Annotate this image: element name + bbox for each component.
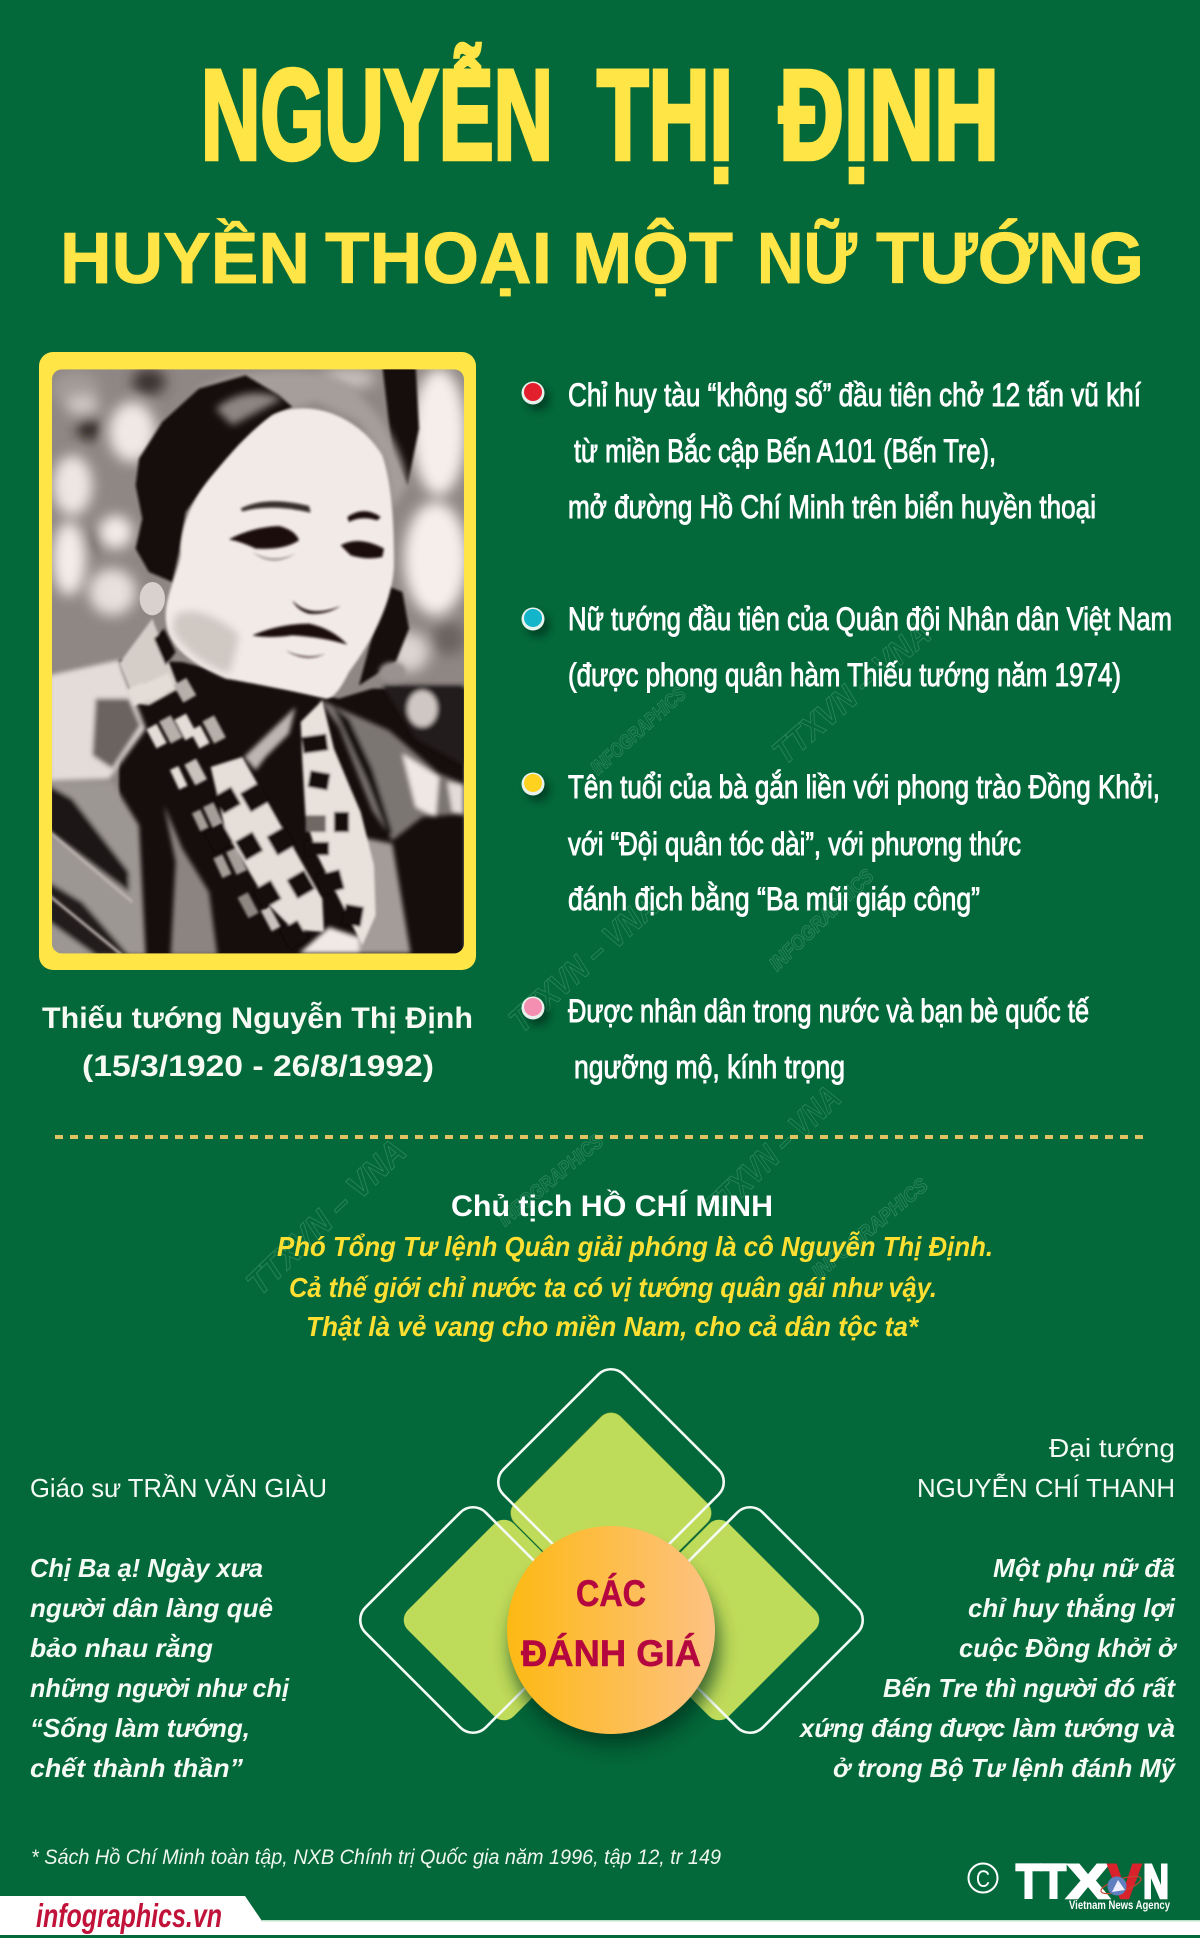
watermarks: TTXVN – VNA	[502, 887, 666, 1040]
quote text: Thật là vẻ vang cho miền Nam, cho cả dân tộc ta*	[306, 1311, 919, 1342]
quote: Ho Chi Minh	[277, 1189, 993, 1342]
fact 3 text	[568, 769, 1160, 917]
quote text	[30, 1553, 290, 1783]
title: main name: NGUYỄN	[201, 44, 553, 187]
wordmark: V	[1108, 1856, 1141, 1909]
neck light	[244, 707, 296, 770]
lower chest light	[359, 837, 411, 953]
watermarks: TTXVN – VNA	[239, 1132, 414, 1303]
quote text	[277, 1231, 993, 1342]
watermarks: TTXVN – VNA	[765, 615, 938, 772]
centre label: CÁC	[576, 1573, 646, 1614]
author: Đại tướng	[1049, 1433, 1175, 1463]
copyright mark: C	[976, 1866, 990, 1893]
copyright mark	[968, 1864, 998, 1893]
quote author: Chủ tịch HỒ CHÍ MINH	[451, 1189, 773, 1223]
centre circle shadow	[511, 1546, 719, 1746]
bullet: cyan	[522, 608, 550, 637]
green diamonds	[398, 1407, 825, 1726]
face	[166, 408, 394, 699]
fact 3 text: đánh địch bằng “Ba mũi giáp công”	[568, 881, 980, 917]
wordmark: TT	[1016, 1856, 1066, 1909]
quote text: Cả thế giới chỉ nước ta có vị tướng quân gái như vậy.	[289, 1272, 937, 1303]
fact 4	[522, 993, 1089, 1085]
scarf: main diagonal band	[205, 757, 324, 949]
watermarks: INFOGRAPHICS	[765, 865, 879, 976]
lower body base	[119, 660, 464, 955]
facial features	[229, 501, 384, 658]
scarf: right band	[301, 700, 376, 945]
portrait caption: Thiếu tướng Nguyễn Thị Định	[42, 1001, 473, 1035]
centre label: ĐÁNH GIÁ	[521, 1633, 701, 1674]
dark hair	[136, 375, 292, 582]
site name: infographics.vn	[36, 1897, 222, 1934]
author: NGUYỄN CHÍ THANH	[917, 1473, 1175, 1503]
fact 3	[522, 769, 1160, 917]
bullet: red	[522, 382, 550, 411]
chest light panel	[164, 805, 217, 955]
watermarks: INFOGRAPHICS	[494, 1130, 608, 1231]
left shoulder light	[49, 660, 146, 780]
title: subtitle: MỘT	[572, 218, 733, 299]
fact 4 text	[568, 993, 1089, 1085]
footnote: * Sách Hồ Chí Minh toàn tập, NXB Chính trị Quốc gia năm 1996, tập 12, tr 149	[31, 1846, 721, 1869]
right shoulder	[319, 699, 464, 840]
quote: Tran Van Giau	[30, 1473, 327, 1783]
portrait caption	[42, 1001, 473, 1083]
title: subtitle: TƯỚNG	[876, 218, 1144, 299]
dark vertical behind head	[382, 365, 419, 485]
wordmark	[1016, 1856, 1169, 1909]
left sleeve	[49, 782, 146, 955]
title: main name	[201, 44, 999, 187]
logo: TTXVN	[968, 1856, 1170, 1912]
quote: Nguyen Chi Thanh	[798, 1433, 1177, 1783]
quote text: Phó Tổng Tư lệnh Quân giải phóng là cô Nguyễn Thị Định.	[277, 1231, 993, 1262]
quote text: Chị Ba ạ! Ngày xưa	[30, 1553, 263, 1583]
fact 4 text: ngưỡng mộ, kính trọng	[574, 1049, 845, 1085]
gray hair top	[196, 371, 407, 509]
wordmark: X	[1067, 1856, 1109, 1909]
quote text: chết thành thần”	[30, 1753, 243, 1783]
fact 1	[522, 377, 1141, 525]
quote text: chỉ huy thắng lợi	[968, 1593, 1176, 1623]
portrait frame	[39, 352, 476, 970]
fact 1 text: từ miền Bắc cập Bến A101 (Bến Tre),	[574, 433, 996, 469]
quote text: “Sống làm tướng,	[30, 1713, 250, 1743]
agency name: Vietnam News Agency	[1069, 1898, 1170, 1912]
globe	[1099, 1873, 1143, 1897]
quote text: xứng đáng được làm tướng và	[798, 1713, 1175, 1743]
author	[917, 1433, 1175, 1503]
watermarks: TTXVN – VNA	[698, 1079, 848, 1226]
portrait caption: (15/3/1920 - 26/8/1992)	[82, 1050, 434, 1083]
fact 1 text	[568, 377, 1141, 525]
quote text: người dân làng quê	[30, 1593, 273, 1623]
title: subtitle: NỮ	[757, 218, 857, 299]
quote text: những người như chị	[30, 1673, 290, 1703]
diagram: evaluations diamonds	[353, 1362, 870, 1746]
title: subtitle: HUYỀN	[60, 218, 310, 299]
title: main name: THỊ	[597, 44, 733, 187]
bullet: yellow	[522, 772, 550, 802]
watermarks: INFOGRAPHICS	[587, 683, 691, 780]
title: main name: ĐỊNH	[779, 44, 999, 187]
fact 2	[522, 601, 1172, 693]
wordmark: N	[1143, 1856, 1169, 1909]
fact 3 text: với “Đội quân tóc dài”, với phương thức	[568, 826, 1021, 862]
watermarks	[239, 615, 938, 1303]
quote text: bảo nhau rằng	[30, 1633, 213, 1663]
quote text: ở trong Bộ Tư lệnh đánh Mỹ	[833, 1753, 1177, 1783]
quote text: cuộc Đồng khởi ở	[959, 1633, 1177, 1663]
watermarks: INFOGRAPHICS	[808, 1174, 933, 1284]
scarf: left upper checks	[119, 619, 281, 931]
bullet: pink	[522, 996, 550, 1026]
quote text: Một phụ nữ đã	[993, 1553, 1176, 1583]
portrait photo	[49, 365, 467, 955]
fact 2 text	[568, 601, 1172, 693]
outlined diamonds	[353, 1362, 870, 1740]
fact 1 text: mở đường Hồ Chí Minh trên biển huyền thoại	[568, 489, 1096, 525]
quote text	[798, 1553, 1177, 1783]
centre circle	[507, 1526, 715, 1734]
title: subtitle	[60, 218, 1144, 299]
title: subtitle: THOẠI	[325, 219, 552, 299]
author: Giáo sư TRẦN VĂN GIÀU	[30, 1473, 327, 1503]
earring	[140, 582, 165, 615]
quote text: Bến Tre thì người đó rất	[883, 1673, 1176, 1703]
footer band	[0, 1896, 1200, 1935]
centre label	[521, 1573, 701, 1674]
